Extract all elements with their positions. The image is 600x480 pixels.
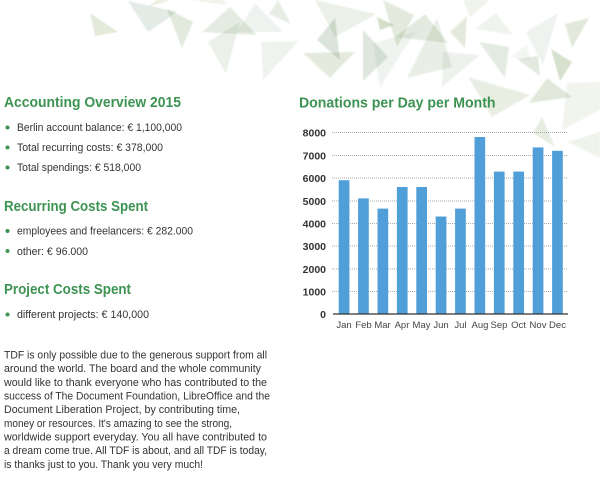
text block: thank you message: around the world. The board and the whole community (4, 363, 262, 375)
panel: accounting overview (4, 95, 182, 174)
list: accounting items: Berlin account balance: € 1,100,000 (17, 122, 182, 134)
bar chart: donations: 3000 (303, 241, 326, 253)
bar chart: donations: 8000 (303, 128, 326, 140)
list: accounting items: Total spendings: € 518,000 (17, 162, 141, 174)
bar chart: donations: 4000 (303, 218, 326, 230)
bar chart: donations: Sep (491, 320, 507, 331)
text block: thank you message: is thanks just to you. Thank you very much! (4, 459, 203, 471)
text block: thank you message: a dream come true. All TDF is about, and all TDF is today, (4, 445, 267, 457)
list: accounting items (6, 122, 182, 174)
bar chart: donations: Jun (433, 320, 449, 331)
bar chart: donations: Mar (374, 320, 391, 331)
heading: recurring costs: Recurring Costs Spent (4, 199, 148, 215)
bar chart: donations: Oct (511, 320, 526, 331)
bar chart: donations: 0 (320, 309, 326, 321)
list: recurring items: other: € 96.000 (17, 246, 88, 258)
bar chart: donations: 1000 (303, 286, 326, 298)
bar chart: donations: Nov (530, 320, 547, 331)
bar chart: donations: 6000 (303, 173, 326, 185)
bar chart: donations: Jul (454, 320, 467, 331)
text block: thank you message: would like to thank everyone who has contributed to the (3, 377, 267, 389)
decorative triangle pattern (90, 0, 600, 158)
bar chart: donations: Aug (472, 320, 488, 331)
bar chart: donations: Jan (336, 320, 352, 331)
panel: project costs (4, 282, 149, 321)
bar chart: donations: 5000 (303, 196, 326, 208)
heading: project costs: Project Costs Spent (4, 282, 131, 298)
text block: thank you message: Document Liberation Project, by contributing time, (4, 404, 240, 416)
list: project items: different projects: € 140,000 (17, 309, 149, 321)
bar chart: donations: 2000 (303, 264, 326, 276)
text block: thank you message: TDF is only possible due to the generous support from all (4, 350, 267, 362)
list: recurring items (6, 226, 193, 258)
bar chart: donations: May (413, 320, 431, 331)
text block: thank you message: worldwide support everyday. You all have contributed to (3, 432, 267, 444)
panel: recurring costs (4, 199, 193, 258)
heading: donations per day per month: Donations per Day per Month (299, 96, 496, 112)
text block: thank you message: money or resources. It's amazing to see the strong, (4, 418, 232, 430)
bar chart: donations: Dec (549, 320, 566, 331)
heading: accounting overview: Accounting Overview 2015 (4, 95, 181, 111)
text block: thank you message: success of The Document Foundation, LibreOffice and the (4, 390, 270, 402)
list: accounting items: Total recurring costs: € 378,000 (17, 142, 163, 154)
bar chart: donations (303, 128, 568, 331)
bar chart: donations: Apr (395, 320, 409, 331)
text block: thank you message (3, 350, 270, 471)
bar chart: donations: 7000 (303, 150, 326, 162)
list: recurring items: employees and freelancers: € 282.000 (17, 226, 193, 238)
bar chart: donations: Feb (355, 320, 372, 331)
